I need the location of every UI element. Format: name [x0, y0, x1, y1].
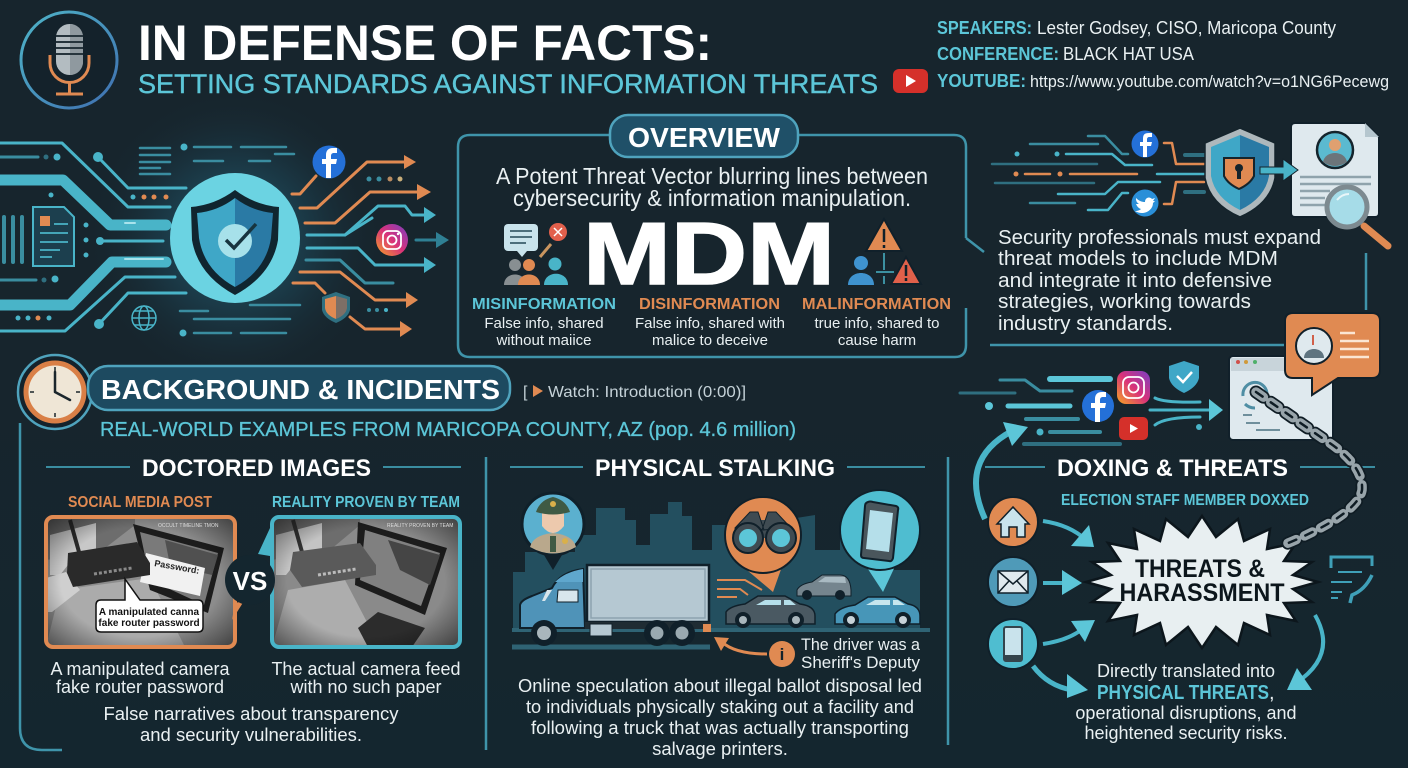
- icon: twitter: [1132, 190, 1158, 216]
- section header: background and incidents: [88, 366, 510, 410]
- starburst: threats and harassment: HARASSMENT: [1120, 579, 1284, 607]
- description: following a truck that was actually transporting: [531, 717, 909, 738]
- caption: actual: [271, 659, 461, 697]
- description: [518, 675, 922, 759]
- description: to individuals physically staking out a facility and: [526, 696, 914, 717]
- callout: fake router password: [98, 618, 200, 629]
- definition: malinformation: [802, 296, 951, 349]
- talk metadata: YOUTUBE:: [937, 71, 1026, 91]
- section subtitle: REAL-WORLD EXAMPLES FROM MARICOPA COUNTY, AZ (pop. 4.6 million): [100, 419, 796, 441]
- threat model illustration: [992, 123, 1388, 246]
- recommendation text: and integrate it into defensive: [998, 270, 1272, 292]
- panel: overview: [458, 115, 984, 357]
- curved arrow: [976, 422, 1028, 519]
- title: IN DEFENSE OF FACTS:: [138, 15, 712, 71]
- takeaway: [103, 703, 399, 745]
- recommendation text: Security professionals must expand: [998, 227, 1321, 249]
- starburst: threats and harassment: THREATS &: [1135, 555, 1265, 583]
- takeaway: False narratives about transparency: [103, 703, 399, 724]
- overview badge: [610, 115, 798, 157]
- talk metadata: BLACK HAT USA: [1063, 44, 1194, 64]
- central shield: [170, 173, 300, 303]
- caption: actual: with no such paper: [289, 677, 442, 697]
- VS badge: [225, 528, 275, 620]
- doctored camera image: [46, 517, 235, 647]
- watch link: [: [523, 384, 528, 401]
- icon: small code window: [1331, 557, 1372, 603]
- panel: doxing and threats: [985, 455, 1375, 743]
- icon: dossier and magnifier: [1291, 123, 1388, 246]
- caption: actual: The actual camera feed: [271, 659, 461, 679]
- speed lines: [717, 580, 762, 597]
- definition: misinformation: [472, 296, 616, 349]
- panel: physical stalking: [510, 455, 930, 759]
- icon: facebook: [312, 146, 346, 178]
- talk metadata: https://www.youtube.com/watch?v=o1NG6Pecewg: [1030, 72, 1389, 91]
- right arrows: [292, 162, 436, 329]
- talk metadata: [937, 18, 1389, 91]
- social media post label: SOCIAL MEDIA POST: [68, 494, 212, 511]
- definition: disinformation: DISINFORMATION: [639, 296, 780, 313]
- consequence text: PHYSICAL THREATS: [1097, 682, 1269, 704]
- icon: youtube: [1119, 417, 1148, 440]
- talk metadata: CONFERENCE:: [937, 44, 1059, 64]
- title: [138, 15, 878, 99]
- talk metadata: SPEAKERS:: [937, 18, 1032, 38]
- caption: manipulated: [50, 659, 231, 697]
- document glyph: [33, 207, 74, 266]
- phone pin: [840, 490, 920, 592]
- blue car: [835, 597, 920, 628]
- icon: small shield: [322, 292, 350, 323]
- dark car: [726, 596, 815, 628]
- definition: misinformation: MISINFORMATION: [472, 296, 616, 313]
- icon: instagram: [1117, 371, 1150, 404]
- definition: malinformation: true info, shared to: [814, 315, 940, 332]
- panel: doctored images: [46, 455, 461, 745]
- MDM wordmark: MDM: [583, 204, 835, 303]
- consequence text: [1075, 661, 1297, 743]
- microphone icon: [21, 12, 117, 108]
- driver note: The driver was a: [801, 636, 921, 654]
- consequence text: Directly translated into: [1097, 661, 1275, 681]
- consequence text: heightened security risks.: [1084, 723, 1288, 743]
- definition: malinformation: MALINFORMATION: [802, 296, 951, 313]
- definition: misinformation: without maiice: [495, 332, 592, 349]
- doxing illustration: social feeds and browser: [960, 313, 1380, 519]
- definition: malinformation: cause harm: [838, 332, 916, 349]
- real camera image: REALITY PROVEN BY TEAM: [387, 523, 453, 529]
- overview summary: A Potent Threat Vector blurring lines between: [496, 163, 928, 189]
- hero illustration: shield and circuits: [0, 88, 449, 388]
- small grey car: [797, 575, 851, 600]
- icon: home: [988, 497, 1038, 547]
- recommendation text: [998, 227, 1321, 335]
- inbound arrows: [1033, 521, 1323, 698]
- callout: A manipulated canna: [99, 607, 200, 618]
- icon: misinformation people: [504, 223, 568, 285]
- arrow: [1209, 399, 1223, 421]
- heading: PHYSICAL STALKING: [595, 455, 835, 482]
- consequence text: operational disruptions, and: [1075, 703, 1297, 723]
- overview badge: OVERVIEW: [628, 122, 781, 153]
- overview summary: cybersecurity & information manipulation.: [513, 185, 911, 211]
- heading: DOXING & THREATS: [1057, 455, 1288, 482]
- icon: mail: [988, 557, 1038, 607]
- icon: facebook: [1082, 390, 1114, 422]
- callout: [96, 579, 203, 632]
- driver note: Sheriff's Deputy: [801, 654, 921, 672]
- definition: misinformation: False info, shared: [484, 315, 604, 332]
- chain: [1256, 392, 1362, 544]
- truck: [520, 565, 711, 646]
- recommendation text: strategies, working towards: [998, 291, 1251, 313]
- talk metadata: Lester Godsey, CISO, Maricopa County: [1037, 18, 1336, 38]
- starburst: threats and harassment: [1086, 516, 1318, 648]
- subtitle: SETTING STANDARDS AGAINST INFORMATION THREATS: [138, 69, 878, 99]
- recommendation text: threat models to include MDM: [998, 248, 1278, 270]
- left circuit traces: [0, 143, 186, 331]
- road: [512, 628, 930, 632]
- definition: disinformation: malice to deceive: [652, 332, 768, 349]
- doctored camera image: OCCULT TIMELINE TMON: [158, 523, 219, 529]
- consequence text: ,: [1269, 682, 1275, 704]
- definition: disinformation: False info, shared with: [635, 315, 785, 332]
- VS badge: VS: [233, 566, 267, 596]
- binoculars pin: [725, 497, 801, 592]
- definition: disinformation: [635, 296, 785, 349]
- takeaway: and security vulnerabilities.: [140, 724, 362, 745]
- icon: phone: [988, 619, 1038, 669]
- reality label: REALITY PROVEN BY TEAM: [272, 494, 460, 511]
- description: salvage printers.: [652, 738, 788, 759]
- doctored camera image: Password:: [154, 558, 200, 576]
- browser window: [1229, 356, 1333, 440]
- icon: malinformation warnings: [848, 219, 921, 285]
- icon: clock: [18, 355, 92, 429]
- icon: facebook: [1132, 130, 1158, 158]
- icon: padlock shield: [1205, 128, 1275, 217]
- icon: instagram: [376, 224, 408, 256]
- icon: youtube: [893, 69, 928, 93]
- sublabel: ELECTION STAFF MEMBER DOXXED: [1061, 492, 1309, 509]
- globe glyph: [132, 306, 156, 330]
- caption: manipulated: A manipulated camera: [50, 659, 231, 679]
- icon: check shield: [1169, 361, 1199, 393]
- recommendation text: industry standards.: [998, 313, 1173, 335]
- arrow: [1260, 159, 1298, 181]
- heading: DOCTORED IMAGES: [142, 455, 371, 482]
- overview summary: [496, 163, 928, 211]
- watch link: Watch: Introduction (0:00)]: [548, 384, 746, 401]
- driver note: [714, 636, 921, 672]
- real camera image: [272, 517, 460, 647]
- speech bubble: [1285, 313, 1380, 395]
- description: Online speculation about illegal ballot disposal led: [518, 675, 922, 696]
- driver note: i: [780, 645, 784, 664]
- officer pin: [522, 493, 584, 570]
- skyline: [513, 502, 920, 630]
- caption: manipulated: fake router password: [56, 677, 224, 697]
- section header: background and incidents: BACKGROUND & INCIDENTS: [101, 374, 500, 405]
